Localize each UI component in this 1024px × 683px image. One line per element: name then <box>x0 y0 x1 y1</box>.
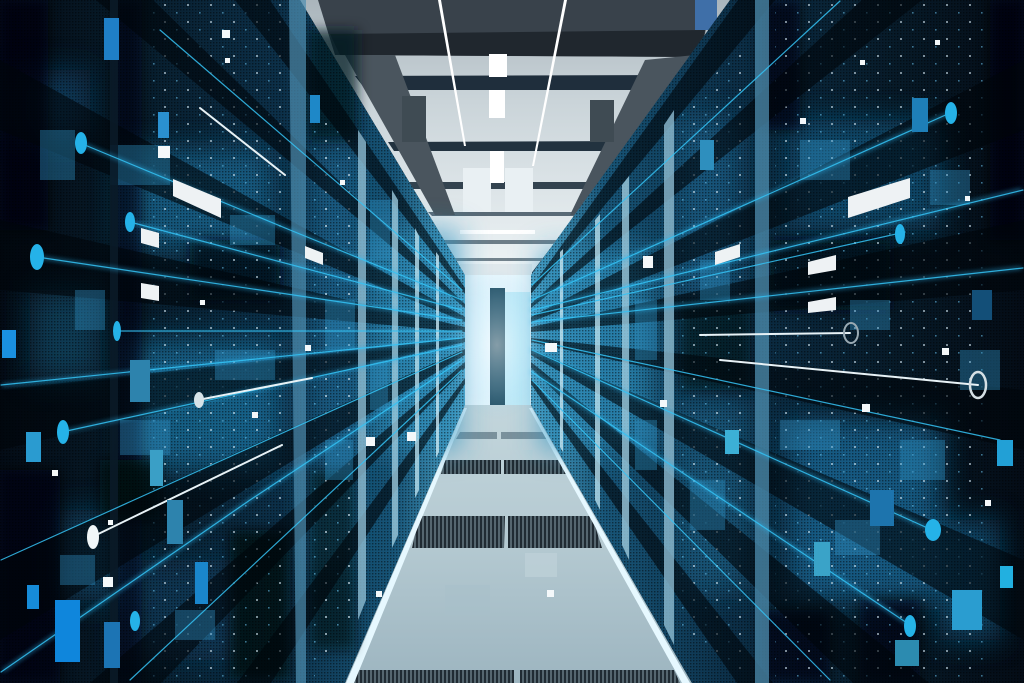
floor grates <box>354 432 680 683</box>
panel: right server wall <box>531 0 1024 683</box>
center light glow <box>447 270 547 420</box>
dark patches left <box>0 0 358 683</box>
floor <box>343 405 692 683</box>
LED rows left <box>145 0 285 683</box>
back door and light <box>463 275 531 407</box>
white particles <box>52 30 991 597</box>
blue glow patches right <box>540 120 1000 640</box>
translucent blue blocks left <box>40 130 390 640</box>
shelf bands right <box>531 0 1024 683</box>
panel: left server wall <box>0 0 465 683</box>
rack posts right <box>560 0 769 683</box>
ceiling <box>300 0 740 276</box>
white label plates <box>141 178 910 313</box>
shelf bands left <box>0 0 465 683</box>
translucent blue blocks right <box>635 140 1000 555</box>
floor edge lights <box>346 408 690 683</box>
streak nodes <box>30 102 986 637</box>
blue glow patches left <box>20 70 460 660</box>
dark patches right <box>680 0 1024 683</box>
LED rows right <box>775 0 985 683</box>
rack posts left <box>110 0 439 683</box>
